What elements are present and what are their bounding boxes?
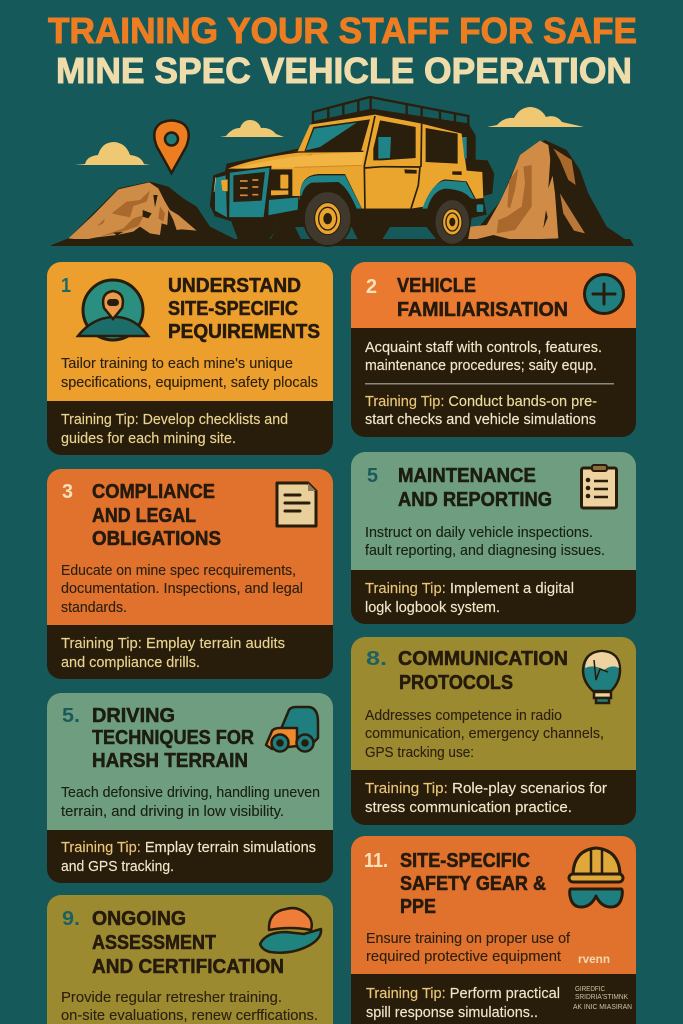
jeep xyxy=(210,97,494,246)
description xyxy=(61,356,318,391)
description: specifications, equipment, safety plocals xyxy=(61,375,318,391)
description: Acquaint staff with controls, features. xyxy=(365,340,602,356)
heading: AND LEGAL xyxy=(92,505,196,527)
number: 9. xyxy=(62,908,80,930)
small print note: GIREDFIC xyxy=(575,986,605,993)
heading: HARSH TERRAIN xyxy=(92,750,248,772)
heading: SAFETY GEAR & xyxy=(400,873,546,895)
training tip: start checks and vehicle simulations xyxy=(365,412,596,428)
heading: TECHNIQUES FOR xyxy=(92,727,254,749)
description: Addresses competence in radio xyxy=(365,708,562,724)
heading: AND CERTIFICATION xyxy=(92,956,284,978)
training tip xyxy=(366,986,560,1021)
description xyxy=(366,931,571,965)
heading xyxy=(168,275,320,343)
training tip: guides for each mining site. xyxy=(61,431,236,447)
icon: site location xyxy=(78,280,148,340)
panel: 1 understand site-specific requirements xyxy=(47,262,333,455)
icon: document xyxy=(277,483,316,526)
heading: SITE-SPECIFIC xyxy=(168,298,298,320)
hood lines xyxy=(227,151,363,168)
door windows xyxy=(373,120,416,160)
icon: cloud right xyxy=(487,107,584,127)
number: 8. xyxy=(366,648,387,670)
training tip: spill response simulations.. xyxy=(366,1005,538,1021)
heading xyxy=(397,275,568,321)
roof rack xyxy=(313,97,468,127)
small print note xyxy=(573,986,632,1011)
number: 5. xyxy=(62,705,80,727)
rear bumper light xyxy=(477,204,483,212)
training tip: Training Tip: Emplay terrain audits xyxy=(61,636,285,652)
description: required protective equipment xyxy=(366,949,561,965)
small badge text: rvenn xyxy=(578,952,610,966)
description xyxy=(61,563,303,616)
training tip: Training Tip: Perform practical xyxy=(366,986,560,1002)
description xyxy=(365,708,604,761)
training tip xyxy=(61,636,285,671)
icon: clipboard xyxy=(582,465,616,508)
heading xyxy=(92,481,221,550)
training tip: Training Tip: Develop checklists and xyxy=(61,412,288,428)
jeep body xyxy=(228,115,483,209)
description: Educate on mine spec recquirements, xyxy=(61,563,296,579)
description: maintenance procedures; saity equp. xyxy=(365,358,597,374)
front wheel xyxy=(304,191,351,246)
heading: MAINTENANCE xyxy=(398,465,536,487)
icon: cloud middle xyxy=(220,120,284,137)
heading: OBLIGATIONS xyxy=(92,528,221,550)
description xyxy=(365,340,602,374)
description: on-site evaluations, renew cerffications. xyxy=(61,1008,318,1024)
front grille and bumper xyxy=(211,167,299,240)
heading: FAMILIARISATION xyxy=(397,299,568,321)
panel: 2 vehicle familiarisation xyxy=(351,262,636,437)
icon: hand holding hard hat xyxy=(260,908,321,953)
description: standards. xyxy=(61,600,127,616)
icon: plus circle xyxy=(584,274,624,314)
right mountain xyxy=(463,140,633,246)
training tip xyxy=(61,840,316,875)
small print note: AK INIC MIASIRAN xyxy=(573,1004,632,1011)
panel: 9 ongoing assessment and certification xyxy=(47,895,333,1024)
number: 3 xyxy=(62,481,73,503)
heading: ASSESSMENT xyxy=(92,932,216,954)
windshield xyxy=(304,119,370,151)
description xyxy=(61,990,318,1024)
training tip: Training Tip: Implement a digital xyxy=(365,581,574,597)
number: 5 xyxy=(367,465,378,487)
heading: PEQUIREMENTS xyxy=(168,321,320,343)
panel: 5 driving techniques for harsh terrain xyxy=(47,693,333,883)
description: Tailor training to each mine's unique xyxy=(61,356,293,372)
training tip: Training Tip: Emplay terrain simulations xyxy=(61,840,316,856)
panel: 5 maintenance and reporting xyxy=(351,452,636,624)
heading: AND REPORTING xyxy=(398,489,552,511)
door lines and handles xyxy=(364,116,422,209)
heading: PROTOCOLS xyxy=(399,672,513,694)
dark silhouette xyxy=(210,109,494,245)
heading: DRIVING xyxy=(92,705,175,727)
description xyxy=(365,525,605,559)
icon: location pin xyxy=(154,120,189,173)
left mountain xyxy=(52,182,240,246)
training tip: Training Tip: Conduct bands-on pre- xyxy=(365,394,597,410)
description: GPS tracking use: xyxy=(365,745,474,761)
title: MINE SPEC VEHICLE OPERATION xyxy=(56,50,632,91)
icon: light bulb xyxy=(583,651,620,703)
training tip xyxy=(365,394,597,428)
heading xyxy=(92,705,254,772)
training tip: stress communication practice. xyxy=(365,800,572,816)
training tip xyxy=(365,581,574,616)
small print note: SRIDRIA'STIMNK xyxy=(575,994,628,1001)
description xyxy=(61,785,320,820)
heading xyxy=(92,908,284,978)
heading xyxy=(398,648,568,694)
number: 2 xyxy=(366,276,377,298)
training tip xyxy=(365,781,607,816)
heading: UNDERSTAND xyxy=(168,275,301,297)
description: communication, emergency channels, xyxy=(365,726,604,742)
icon: helmet and goggles xyxy=(569,848,623,907)
number: 1 xyxy=(61,275,71,297)
heading xyxy=(398,465,552,511)
heading: ONGOING xyxy=(92,908,186,930)
icon: cloud left xyxy=(75,142,150,165)
title xyxy=(48,10,637,91)
heading: PPE xyxy=(400,896,436,918)
training tip: and compliance drills. xyxy=(61,655,200,671)
panel: 8 communication protocols xyxy=(351,637,636,825)
training tip: logk logbook system. xyxy=(365,600,500,616)
panel: 3 compliance and legal obligations xyxy=(47,469,333,679)
number: 11. xyxy=(364,850,388,872)
heading xyxy=(400,850,546,918)
description: fault reporting, and diagnesing issues. xyxy=(365,543,605,559)
training tip xyxy=(61,412,288,447)
ground xyxy=(50,239,634,246)
description: Ensure training on proper use of xyxy=(366,931,571,947)
training tip: Training Tip: Role-play scenarios for xyxy=(365,781,607,797)
panel: 11 site-specific safety gear and PPE xyxy=(351,836,636,1024)
heading: VEHICLE xyxy=(397,275,476,297)
icon: vehicle xyxy=(266,707,318,752)
heading: COMPLIANCE xyxy=(92,481,215,503)
heading: SITE-SPECIFIC xyxy=(400,850,530,872)
description: Provide regular retresher training. xyxy=(61,990,282,1006)
description: terrain, and driving in low visibility. xyxy=(61,804,284,820)
heading: COMMUNICATION xyxy=(398,648,568,670)
hero illustration: jeep in mining landscape xyxy=(50,97,634,246)
front wheel arch xyxy=(298,174,362,227)
description: documentation. Inspections, and legal xyxy=(61,581,303,597)
description: Instruct on daily vehicle inspections. xyxy=(365,525,593,541)
description: Teach defonsive driving, handling uneven xyxy=(61,785,320,801)
rear wheel arch xyxy=(422,179,477,216)
title: TRAINING YOUR STAFF FOR SAFE xyxy=(48,10,637,51)
rear wheel xyxy=(435,199,470,245)
training tip: and GPS tracking. xyxy=(61,859,174,875)
